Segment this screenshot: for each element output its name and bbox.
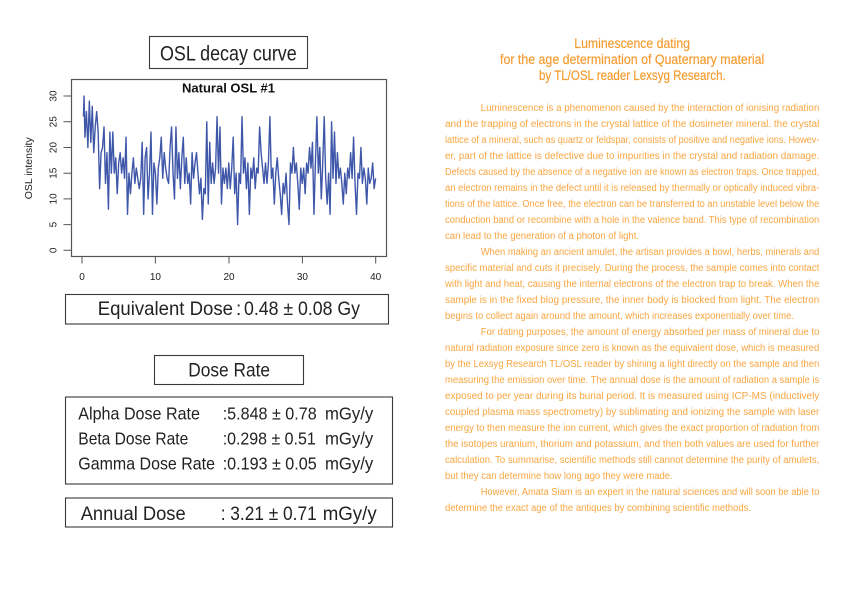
y axis [48, 90, 72, 253]
text block: article body: calculation. To summarise, scientific methods still cannot determine the purity of amulets, [445, 455, 819, 466]
row: beta [78, 429, 374, 449]
text block: article body: However, Amata Siam is an expert in the natural sciences and will soon be able to [481, 487, 819, 498]
text block: article body: energy to then measure the ion current, which gives the exact proportion of radiation from [445, 423, 819, 434]
heading: OSL decay curve [150, 36, 308, 68]
y axis label: OSL intensity [24, 137, 35, 199]
text block: article body: Luminescence is a phenomenon caused by the interaction of ionising radiation [481, 103, 819, 114]
x axis: 10 [150, 272, 161, 283]
text block: article body [444, 103, 820, 514]
text block: article body: by the Lexsyg Research TL/OSL reader by shining a light directly on the sample and then [445, 359, 819, 370]
text block: article body: an electron remains in the defect until it is released by thermally or optically induced vibra- [445, 183, 819, 194]
result box: equivalent dose: 0.48 ± 0.08 Gy [244, 298, 360, 320]
data line [83, 96, 376, 225]
y axis: 15 [48, 167, 60, 179]
row: alpha [78, 403, 374, 423]
y axis: 20 [48, 142, 60, 153]
row: beta: :0.298 ± 0.51 [223, 429, 316, 449]
text block: article body: can lead to the generation of a photon of light. [445, 231, 639, 242]
text block: article body: the isotopes uranium, thorium and potassium, and then both values are used for further [445, 439, 820, 450]
x axis: 0 [79, 272, 85, 283]
result box: annual dose [66, 498, 392, 527]
text block: article body: tions of the lattice. Once free, the electron can be transferred to an unstable level below the [445, 199, 819, 210]
text block: article body: For dating purposes, the amount of energy absorbed per mass of mineral due to [481, 327, 819, 338]
y axis: 25 [48, 116, 60, 127]
result box: equivalent dose [66, 294, 388, 324]
y axis: 5 [48, 221, 60, 227]
article title: by TL/OSL reader Lexsyg Research. [539, 68, 726, 83]
x axis: 40 [370, 272, 382, 283]
x axis [79, 256, 382, 283]
row: beta: Beta Dose Rate [78, 429, 188, 449]
text block: article body: begins to collect again around the amount, which increases exponentially over time. [445, 311, 794, 322]
result box: annual dose: Annual Dose [81, 503, 186, 525]
article title: Luminescence dating [574, 36, 690, 51]
text block: article body: specific material and cuts it precisely. During the process, the sample comes into contact [445, 263, 820, 274]
result box: equivalent dose: Equivalent Dose [98, 298, 233, 320]
article title [500, 36, 764, 83]
text block: article body: measuring the emission over time. The annual dose is the amount of radiation a sample is [445, 375, 819, 386]
y axis: 10 [48, 193, 60, 204]
result box: equivalent dose: : [236, 299, 241, 320]
result box: annual dose: : 3.21 ± 0.71 [221, 503, 317, 525]
row: alpha: mGy/y [325, 403, 374, 423]
y axis: 30 [48, 90, 60, 102]
result box: annual dose: mGy/y [323, 503, 377, 525]
text block: article body: exposed to per year during its burial period. It is measured using ICP-MS (inductively [445, 391, 819, 402]
text block: article body: natural radiation exposure since zero is known as the equivalent dose, which is measured [445, 343, 819, 354]
text block: article body: with light and heat, causing the internal electrons of the electron trap to break. When the [444, 279, 819, 290]
article title: for the age determination of Quaternary material [500, 52, 764, 67]
heading: Dose Rate [154, 356, 304, 384]
panel: dose rate table [66, 397, 392, 484]
text block: article body: determine the exact age of the antiques by combining scientific methods. [445, 503, 751, 514]
text block: article body: and the trapping of electrons in the crystal lattice of the dosimeter mineral. the crystal [445, 119, 819, 130]
text block: article body: sample is in the fixed blog pressure, the inner body is blocked from light. The electron [445, 295, 819, 306]
y axis: 0 [48, 247, 60, 253]
text block: article body: er, part of the lattice is defective due to impurities in the crystal and radiation damage. [445, 151, 819, 162]
text block: article body: Defects caused by the absence of a negative ion are known as electron traps. Once trapped, [445, 167, 819, 178]
row: gamma: Gamma Dose Rate [78, 453, 215, 473]
x axis: 30 [297, 272, 308, 283]
row: beta: mGy/y [325, 429, 374, 449]
row: alpha: :5.848 ± 0.78 [223, 403, 317, 423]
text block: article body: lattice of a mineral, such as quartz or feldspar, consists of positive and negative ions. Howev- [445, 135, 819, 146]
heading: Dose Rate: Dose Rate [188, 360, 270, 382]
heading: OSL decay curve: OSL decay curve [160, 43, 297, 66]
row: gamma [78, 453, 374, 473]
text block: article body: conduction band or recombine with a hole in the valence band. This type of recombination [445, 215, 819, 226]
text block: article body: When making an ancient amulet, the artisan provides a bowl, herbs, minerals and [481, 247, 819, 258]
chart title: Natural OSL #1 [182, 81, 275, 96]
row: gamma: mGy/y [325, 453, 374, 473]
text block: article body: coupled plasma mass spectrometry) by sublimating and ionizing the sample with laser [445, 407, 820, 418]
text block: article body: but they can determine how long ago they were made. [445, 471, 673, 482]
row: alpha: Alpha Dose Rate [78, 403, 200, 423]
line chart: Natural OSL #1 [24, 80, 386, 283]
row: gamma: :0.193 ± 0.05 [223, 453, 317, 473]
x axis: 20 [223, 272, 235, 283]
